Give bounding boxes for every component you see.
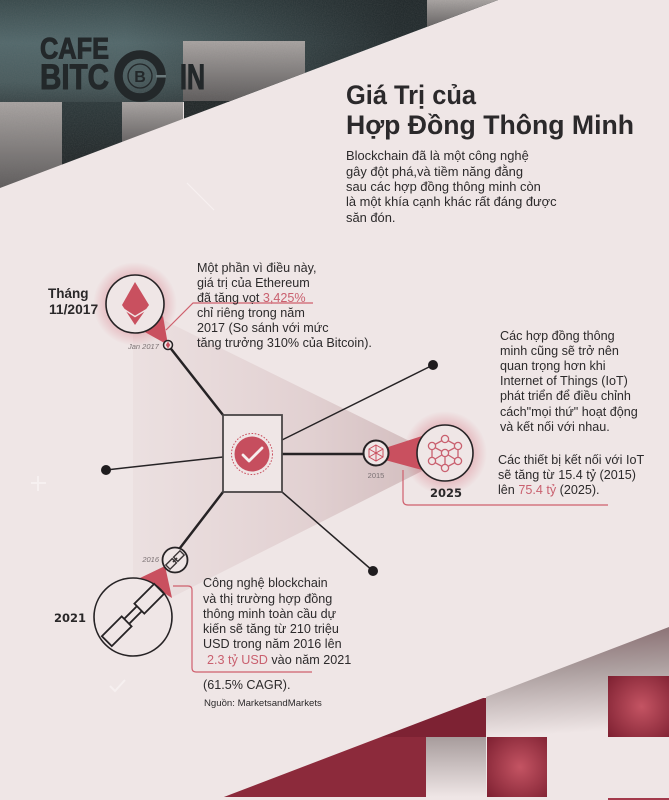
callout leader: blockchain	[173, 586, 312, 672]
milestone: November 2017, Ethereum: 11/2017	[49, 302, 98, 317]
text block: Ethereum: giá trị của Ethereum	[197, 276, 310, 290]
text block: IoT importance: cách"mọi thứ" hoạt động	[500, 405, 638, 419]
logo: Cafe Bitcoin: CAFE	[40, 32, 109, 66]
intro text: săn đón.	[346, 210, 395, 225]
text block: Ethereum: 2017 (So sánh với mức	[197, 321, 328, 335]
text block: Ethereum: chỉ riêng trong năm	[197, 306, 305, 320]
text block: blockchain market: (61.5% CAGR).	[203, 678, 290, 692]
icon: network of nodes	[428, 435, 462, 472]
logo: Cafe Bitcoin: BITC	[40, 58, 109, 97]
text block: IoT importance: Các hợp đồng thông	[500, 329, 615, 343]
milestone: 2021, blockchain: 2021	[54, 611, 86, 625]
text block: Ethereum: đã tăng vọt 3,425%	[197, 291, 306, 305]
title	[346, 80, 634, 140]
milestone: 2025, IoT: 2015	[368, 471, 384, 480]
text block: blockchain market: 2.3 tỷ USD vào năm 2021	[207, 653, 351, 667]
milestone: November 2017, Ethereum	[48, 262, 177, 351]
text block: IoT importance: phát triển để điều chỉnh	[500, 389, 631, 403]
title: Giá Trị của	[346, 80, 477, 110]
source note: Nguồn: MarketsandMarkets	[204, 698, 322, 709]
intro text	[346, 148, 557, 225]
text block: IoT devices: sẽ tăng từ 15.4 tỷ (2015)	[498, 468, 636, 482]
intro text: sau các hợp đồng thông minh còn	[346, 179, 541, 194]
logo: Cafe Bitcoin: B	[134, 69, 146, 86]
end dots	[101, 360, 438, 576]
milestone: November 2017, Ethereum: Jan 2017	[127, 342, 160, 351]
decorative sparkles	[31, 183, 214, 691]
logo: Cafe Bitcoin	[40, 32, 205, 98]
text block: blockchain market: kiến sẽ tăng từ 210 triệu	[203, 622, 339, 636]
pale triangle behind the diagram	[133, 305, 446, 617]
milestone: 2025, IoT: 2025	[430, 486, 462, 500]
text block: blockchain market: và thị trường hợp đồng	[203, 592, 332, 606]
icon: small network	[369, 445, 383, 461]
intro text: Blockchain đã là một công nghệ	[346, 148, 529, 163]
text block: IoT devices: Các thiết bị kết nối với IoT	[498, 453, 644, 467]
milestone: November 2017, Ethereum: Tháng	[48, 286, 88, 301]
title: Hợp Đồng Thông Minh	[346, 110, 634, 140]
icon: small chain	[166, 551, 184, 569]
text block: Ethereum	[197, 261, 372, 350]
top checker banner	[0, 0, 498, 188]
intro text: là một khía cạnh khác rất đáng được	[346, 194, 557, 209]
callout leader: Ethereum	[166, 303, 313, 330]
text block: Ethereum: tăng trưởng 310% của Bitcoin).	[197, 336, 372, 350]
text block: IoT devices	[498, 453, 644, 497]
logo: Cafe Bitcoin: IN	[180, 58, 205, 97]
milestone: 2021, blockchain	[54, 548, 188, 656]
text block: IoT importance: và kết nối với nhau.	[500, 420, 610, 434]
text block: blockchain market: Công nghệ blockchain	[203, 576, 328, 590]
text block: IoT devices: lên 75.4 tỷ (2025).	[498, 483, 600, 497]
icon: chain link	[102, 584, 164, 646]
text block: blockchain market	[203, 576, 351, 692]
milestone: 2021, blockchain: 2016	[141, 555, 160, 564]
text block: IoT importance: Internet of Things (IoT)	[500, 374, 628, 388]
text block: Ethereum: Một phần vì điều này,	[197, 261, 316, 275]
intro text: gây đột phá,và tiềm năng đằng	[346, 164, 523, 179]
text block: IoT importance	[500, 329, 638, 434]
central smart-contract box	[223, 415, 282, 492]
text block: blockchain market: thông minh toàn cầu dự	[203, 607, 337, 621]
text block: blockchain market: USD trong năm 2016 lên	[203, 637, 342, 651]
icon: Ethereum diamond	[122, 282, 149, 325]
callout leader: IoT	[403, 470, 608, 505]
diagram connectors	[106, 345, 433, 571]
text block: IoT importance: minh cũng sẽ trở nên	[500, 344, 619, 358]
milestone: 2025, IoT	[364, 411, 487, 500]
text block: IoT importance: quan trọng hơn khi	[500, 359, 606, 373]
bottom checker banner	[216, 627, 669, 800]
